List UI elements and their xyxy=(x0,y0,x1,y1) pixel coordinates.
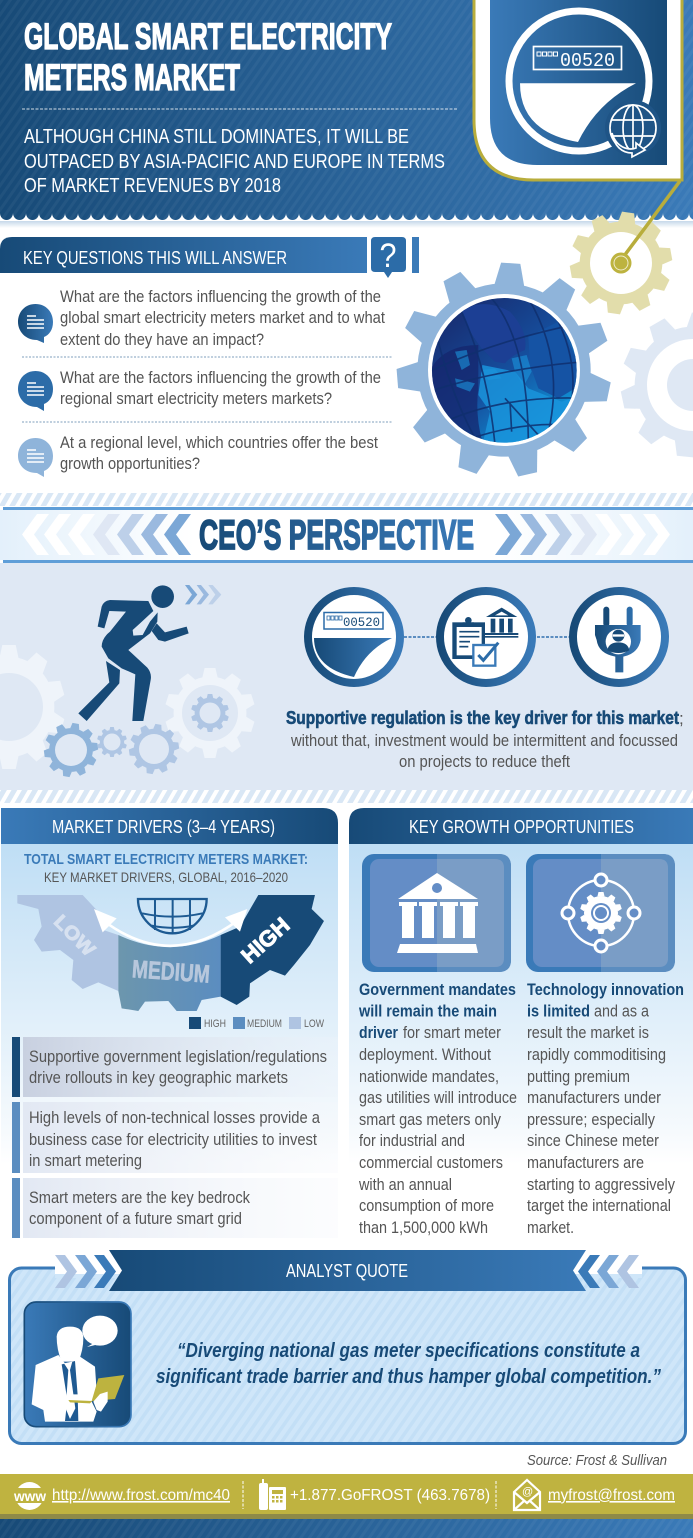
needle connector xyxy=(610,181,680,274)
text: government mandates: for industrial and xyxy=(359,1132,465,1150)
text: technology innovation: manufacturers are xyxy=(527,1154,644,1172)
icon: email xyxy=(514,1480,540,1510)
check box xyxy=(473,643,498,666)
icon tile: government xyxy=(362,854,511,972)
icon: meter circle xyxy=(308,591,400,683)
footer xyxy=(0,1474,693,1538)
title xyxy=(24,16,392,98)
heading: growth xyxy=(349,808,693,844)
key questions header: KEY QUESTIONS THIS WILL ANSWER xyxy=(23,248,287,268)
text: government mandates: will remain the main xyxy=(358,1002,497,1020)
key questions header xyxy=(0,237,419,278)
quote banner xyxy=(109,1250,586,1291)
text: government mandates: nationwide mandates, xyxy=(359,1068,499,1086)
arc arrows xyxy=(94,909,247,946)
quote text xyxy=(156,1340,661,1388)
big gear with globe xyxy=(396,262,611,476)
text: technology innovation xyxy=(527,981,684,1237)
text: government mandates: deployment. Without xyxy=(359,1046,491,1064)
driver 2: business case for electricity utilities to invest xyxy=(29,1131,317,1149)
icon: running businessman xyxy=(78,585,221,721)
chevrons left xyxy=(22,514,191,555)
question 3 xyxy=(18,433,378,477)
link: website: http://www.frost.com/mc40 xyxy=(52,1487,230,1504)
half globe xyxy=(138,899,207,933)
question 2: regional smart electricity meters markets? xyxy=(60,389,332,408)
chevrons right xyxy=(495,514,670,555)
CEO statement: ; xyxy=(679,709,684,728)
icon: meter ring xyxy=(509,11,649,151)
CEO section xyxy=(0,493,693,803)
gear: olive xyxy=(563,205,679,321)
text: government mandates: smart gas meters only xyxy=(359,1111,502,1129)
text: government mandates: Government mandates xyxy=(359,981,516,999)
chevrons left xyxy=(55,1255,116,1288)
gear gauge chart: HIGH xyxy=(236,912,295,968)
analyst portrait xyxy=(24,1302,131,1427)
text: government mandates: consumption of more xyxy=(359,1197,494,1215)
gear gauge chart xyxy=(17,895,324,1011)
question 1: extent do they have an impact? xyxy=(60,330,264,349)
text: technology innovation: pressure; especially xyxy=(527,1111,656,1129)
clipboard xyxy=(452,617,485,659)
icon: globe with arrow xyxy=(605,100,661,157)
driver 2: High levels of non-technical losses provide a xyxy=(29,1109,321,1127)
text: technology innovation: and as a xyxy=(594,1002,650,1020)
driver 1: Supportive government legislation/regulations xyxy=(29,1048,327,1066)
text: government mandates: gas utilities will introduce xyxy=(359,1089,517,1107)
text: technology innovation: putting premium xyxy=(527,1068,630,1086)
chart title: TOTAL SMART ELECTRICITY METERS MARKET: xyxy=(24,851,308,868)
question 2 xyxy=(18,368,381,411)
driver 3 xyxy=(12,1178,338,1238)
driver 2: in smart metering xyxy=(29,1152,142,1170)
panel: analyst quote xyxy=(10,1250,686,1444)
text: technology innovation: rapidly commoditising xyxy=(527,1046,666,1064)
gear gauge chart: LOW xyxy=(49,911,99,961)
subtitle: OUTPACED BY ASIA-PACIFIC AND EUROPE IN TERMS xyxy=(24,150,445,173)
meter callout panel xyxy=(474,0,682,180)
driver 3: Smart meters are the key bedrock xyxy=(29,1189,251,1207)
legend: HIGH xyxy=(204,1018,226,1030)
text: technology innovation: result the market is xyxy=(527,1024,649,1042)
icon: phone xyxy=(259,1479,286,1510)
link: email: myfrost@frost.com xyxy=(548,1487,675,1504)
text: government mandates: commercial customers xyxy=(359,1154,503,1172)
text: government mandates: for smart meter xyxy=(403,1024,501,1042)
dotted connectors xyxy=(404,636,569,638)
icon: speech bubble xyxy=(18,438,53,477)
text: technology innovation: target the international xyxy=(527,1197,671,1215)
chevrons right xyxy=(578,1255,639,1288)
icon: meter ring: 00520 xyxy=(560,50,615,72)
icon: email: @ xyxy=(522,1486,533,1498)
heading: market drivers xyxy=(1,808,338,844)
heading: growth: KEY GROWTH OPPORTUNITIES xyxy=(409,817,634,837)
legend: LOW xyxy=(304,1018,324,1030)
globe image xyxy=(428,298,585,445)
CEO statement xyxy=(286,708,684,771)
panel: market drivers xyxy=(1,808,338,1244)
CEO statement: on projects to reduce theft xyxy=(399,752,570,771)
source: Source: Frost & Sullivan xyxy=(527,1452,667,1469)
arrows ahead xyxy=(185,585,221,604)
chart title xyxy=(24,851,308,885)
question 2: What are the factors influencing the growth of the xyxy=(60,368,381,387)
heading: market drivers: MARKET DRIVERS (3–4 YEARS) xyxy=(52,817,275,837)
question 1: What are the factors influencing the growth of the xyxy=(60,287,381,306)
question 3: At a regional level, which countries offer the best xyxy=(60,433,378,452)
panel: key growth opportunities xyxy=(349,808,693,1244)
question 3: growth opportunities? xyxy=(60,454,200,473)
gears under runner xyxy=(0,645,255,781)
chart title: KEY MARKET DRIVERS, GLOBAL, 2016–2020 xyxy=(44,869,288,885)
driver 1: drive rollouts in key geographic markets xyxy=(29,1069,288,1087)
quote banner: ANALYST QUOTE xyxy=(286,1261,408,1281)
legend xyxy=(189,1017,324,1030)
driver 3: component of a future smart grid xyxy=(29,1210,242,1228)
text: government mandates: than 1,500,000 kWh xyxy=(359,1219,488,1237)
gear gauge chart: MEDIUM xyxy=(131,955,211,989)
text: technology innovation: manufacturers under xyxy=(527,1089,661,1107)
icon: www: www xyxy=(13,1488,46,1504)
subtitle: OF MARKET REVENUES BY 2018 xyxy=(24,174,281,197)
icon: plug circle xyxy=(573,591,665,683)
text: technology innovation: is limited xyxy=(527,1002,590,1020)
text: government mandates: with an annual xyxy=(358,1176,452,1194)
icon: www xyxy=(13,1482,46,1510)
text: government mandates: driver xyxy=(359,1024,398,1042)
icon: meter circle: 00520 xyxy=(343,615,380,630)
text: technology innovation: since Chinese meter xyxy=(527,1132,659,1150)
bank xyxy=(485,608,518,638)
driver 2 xyxy=(12,1102,338,1173)
text: technology innovation: starting to aggressively xyxy=(527,1176,676,1194)
icon tile: technology xyxy=(526,854,675,972)
icon: speech bubble xyxy=(18,304,53,343)
driver 1 xyxy=(12,1037,338,1097)
CEO heading: CEO’S PERSPECTIVE xyxy=(199,511,474,558)
legend: MEDIUM xyxy=(247,1018,282,1030)
title: METERS MARKET xyxy=(24,57,240,98)
subtitle xyxy=(24,125,445,197)
question 1 xyxy=(18,287,385,349)
text: government mandates xyxy=(358,981,517,1237)
question 1: global smart electricity meters market and to what xyxy=(60,308,385,327)
icon: question bubble: ? xyxy=(380,237,396,275)
icon: speech bubble xyxy=(18,371,53,411)
gear: pale right xyxy=(614,306,693,464)
subtitle: ALTHOUGH CHINA STILL DOMINATES, IT WILL BE xyxy=(24,125,409,148)
text: technology innovation: market. xyxy=(527,1219,574,1237)
icon: regulation circle xyxy=(440,591,532,683)
phone number: +1.877.GoFROST (463.7678) xyxy=(290,1487,490,1504)
header banner xyxy=(0,0,693,228)
title: GLOBAL SMART ELECTRICITY xyxy=(24,16,392,57)
icon: question bubble xyxy=(371,237,406,278)
